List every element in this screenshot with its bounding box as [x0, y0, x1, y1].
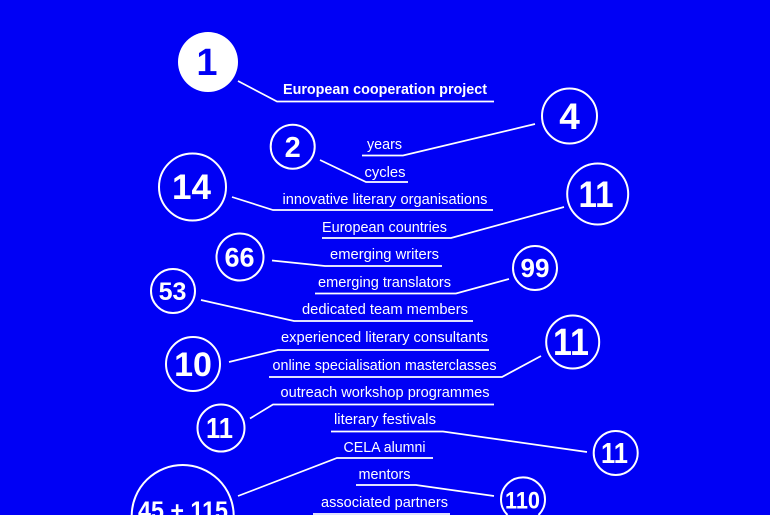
item: 45 + 115 CELA alumni: CELA alumni — [344, 440, 426, 456]
item: associated partners: associated partners — [321, 495, 448, 511]
item: 11 online specialisation masterclasses: 11 — [553, 322, 589, 364]
item: 11 literary festivals — [331, 412, 638, 475]
item: 53 dedicated team members: 53 — [159, 278, 186, 306]
item: 11 outreach workshop programmes: 11 — [206, 413, 233, 445]
item: 11 online specialisation masterclasses — [269, 316, 599, 377]
item: 1 European cooperation project: European cooperation project — [283, 82, 487, 98]
item: 11 online specialisation masterclasses: online specialisation masterclasses — [272, 358, 496, 374]
item: 1 European cooperation project: 1 — [196, 42, 218, 84]
item: 110 mentors: mentors — [358, 467, 410, 483]
item: 10 experienced literary consultants: 10 — [174, 346, 212, 384]
item: 66 emerging writers — [216, 234, 442, 280]
item: 10 experienced literary consultants: experienced literary consultants — [281, 330, 488, 346]
item: 45 + 115 CELA alumni — [132, 440, 433, 515]
item: 2 cycles: 2 — [285, 132, 301, 164]
item: 11 European countries: 11 — [578, 174, 614, 215]
item: 99 emerging translators: emerging translators — [318, 275, 451, 291]
item: 14 innovative literary organisations: 14 — [172, 168, 211, 207]
item: 10 experienced literary consultants — [166, 330, 489, 391]
item: 110 mentors: 110 — [505, 488, 540, 514]
item: 4 years: 4 — [559, 96, 580, 137]
item: 11 European countries: European countries — [322, 220, 447, 236]
item: 99 emerging translators: 99 — [521, 253, 549, 283]
item: 2 cycles: cycles — [364, 165, 406, 181]
item: 11 literary festivals: 11 — [601, 438, 628, 470]
item: 53 dedicated team members: dedicated team members — [302, 302, 468, 318]
item: 110 mentors — [356, 467, 545, 515]
item: 11 European countries — [322, 164, 628, 238]
item: 1 European cooperation project — [178, 32, 494, 102]
item: 14 innovative literary organisations: innovative literary organisations — [282, 192, 488, 208]
item: 11 outreach workshop programmes — [198, 385, 494, 452]
item: 4 years: years — [367, 137, 402, 153]
item: 99 emerging translators — [315, 246, 557, 294]
item: 66 emerging writers: emerging writers — [330, 247, 439, 263]
item: 66 emerging writers: 66 — [224, 242, 255, 272]
item: 2 cycles — [271, 125, 408, 182]
item: 11 literary festivals: literary festivals — [334, 412, 436, 428]
item: 4 years — [362, 88, 597, 156]
item: 11 outreach workshop programmes: outreach workshop programmes — [280, 385, 490, 401]
item: 14 innovative literary organisations — [159, 154, 493, 220]
item: 53 dedicated team members — [151, 269, 473, 321]
